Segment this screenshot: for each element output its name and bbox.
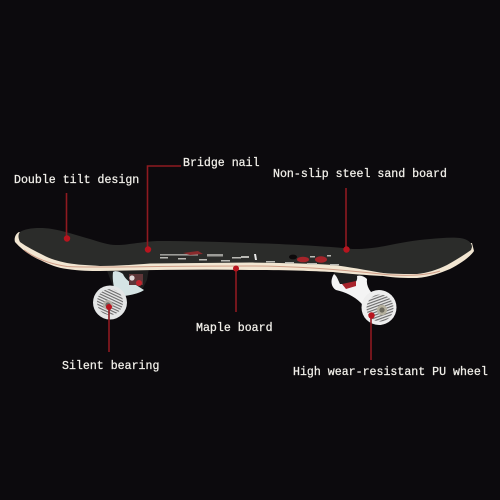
rear wheel (93, 286, 127, 320)
label: Silent bearing: Silent bearing (62, 360, 159, 373)
rear truck (106, 268, 149, 296)
deck graphic (160, 251, 339, 265)
label: Bridge nail: Bridge nail (183, 157, 260, 170)
label: Maple board: Maple board (196, 322, 273, 335)
front wheel (362, 290, 396, 325)
label: Double tilt design: Double tilt design (14, 174, 139, 187)
front truck (332, 270, 378, 313)
label: Non-slip steel sand board (273, 168, 447, 253)
skateboard illustration (15, 228, 474, 325)
label: High wear-resistant PU wheel (293, 312, 488, 379)
label: Non-slip steel sand board: Non-slip steel sand board (273, 168, 447, 181)
label: Double tilt design (14, 174, 139, 242)
grip tape (18, 228, 472, 274)
maple deck (15, 232, 474, 278)
label: Silent bearing (62, 304, 159, 373)
deck ply stripe (24, 250, 440, 275)
label: Bridge nail (145, 157, 260, 253)
label: Maple board (196, 266, 273, 335)
label: High wear-resistant PU wheel: High wear-resistant PU wheel (293, 366, 488, 379)
